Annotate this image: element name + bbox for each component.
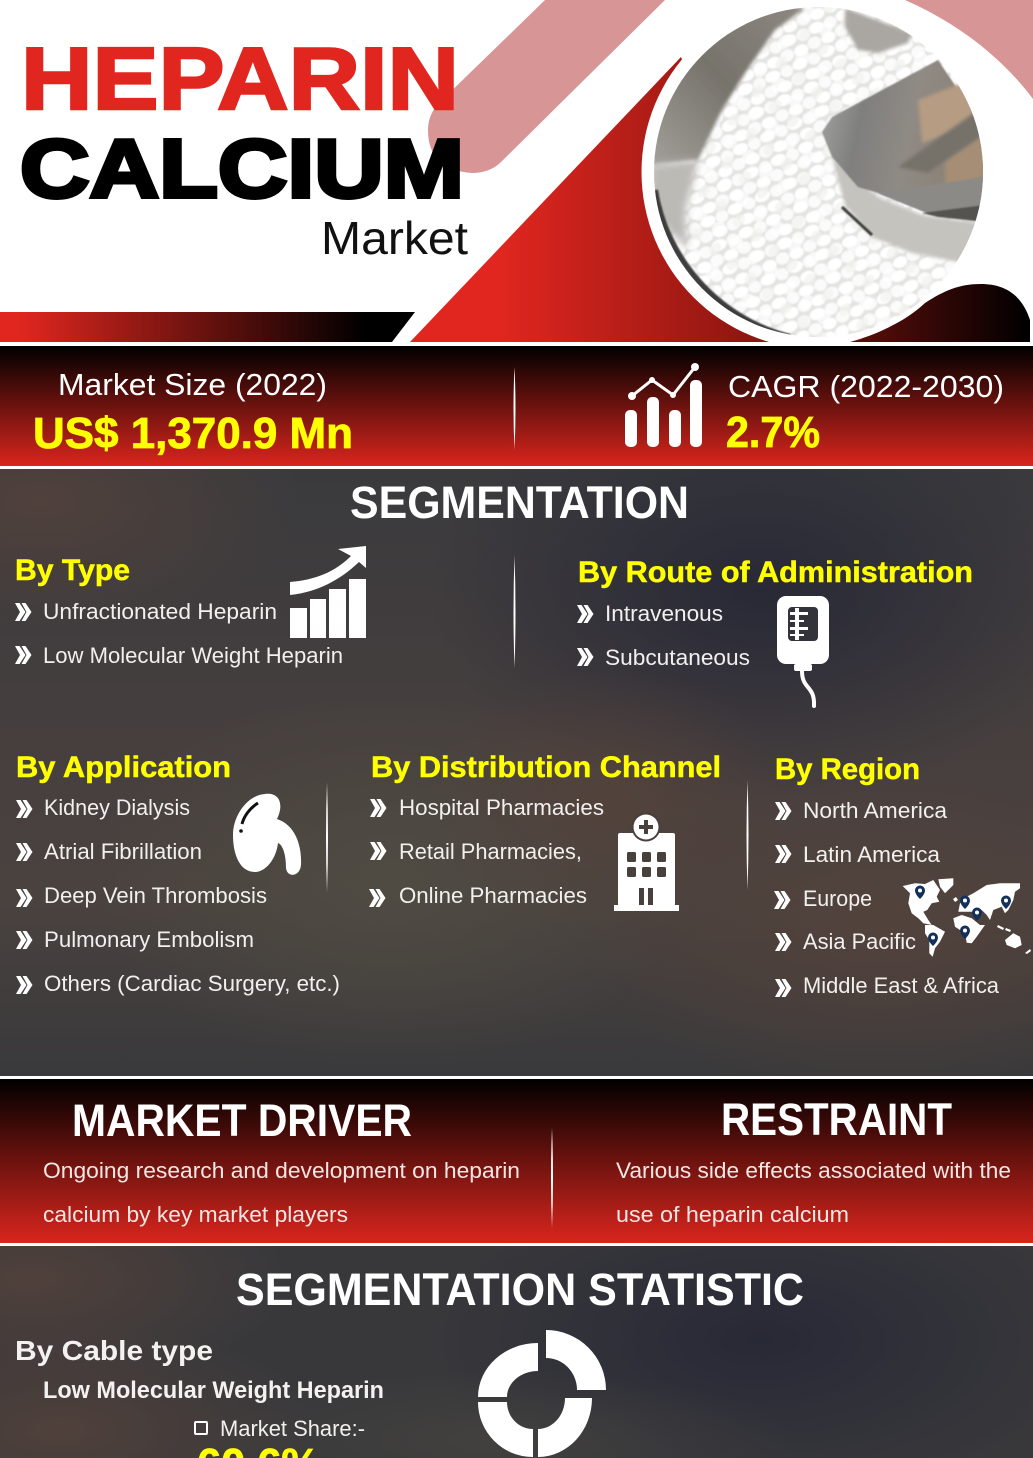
block: by route of administration: Intravenous xyxy=(605,601,723,626)
decorative pink corner shape xyxy=(905,0,1033,99)
restraint text: Various side effects associated with the xyxy=(616,1158,1011,1183)
panel: segmentation xyxy=(0,469,1033,1076)
title: CALCIUM: CALCIUM xyxy=(20,122,464,215)
block: by region: By Region xyxy=(775,753,920,786)
block: by application xyxy=(16,751,340,996)
red gradient triangle xyxy=(410,57,800,342)
dark gradient hump xyxy=(850,284,1030,342)
block: by application: Others (Cardiac Surgery, etc.) xyxy=(44,971,340,996)
heading: SEGMENTATION: SEGMENTATION xyxy=(350,477,689,528)
heading: MARKET DRIVER: MARKET DRIVER xyxy=(72,1095,412,1146)
market share label: Market Share:- xyxy=(220,1416,365,1441)
block: by type: Unfractionated Heparin xyxy=(43,599,277,624)
block: by route of administration xyxy=(577,556,973,706)
block: by application: Kidney Dialysis xyxy=(44,795,190,820)
CAGR value: 2.7% xyxy=(726,408,820,457)
icon: growth bar chart with trend line xyxy=(625,363,702,447)
heading: SEGMENTATION STATISTIC: SEGMENTATION STATISTIC xyxy=(236,1264,804,1315)
panel: segmentation statistic xyxy=(0,1246,1033,1458)
block: by distribution channel: By Distribution Channel xyxy=(371,751,721,784)
photo: white heparin calcium tablets in a metal bowl with scoop xyxy=(640,0,990,342)
divider line xyxy=(0,466,1033,469)
block: by route of administration: By Route of Administration xyxy=(578,556,973,589)
block: by distribution channel: Hospital Pharmacies xyxy=(399,795,604,820)
block: by application: Deep Vein Thrombosis xyxy=(44,883,267,908)
band: market driver and restraint xyxy=(0,1079,1033,1243)
block: by region xyxy=(774,753,1031,998)
restraint text: use of heparin calcium xyxy=(616,1202,849,1227)
block: by application: Atrial Fibrillation xyxy=(44,839,202,864)
block: by type: Low Molecular Weight Heparin xyxy=(43,643,343,668)
market driver text xyxy=(43,1158,520,1227)
leading segment name: Low Molecular Weight Heparin xyxy=(43,1377,384,1404)
icon: rising bars with arrow xyxy=(290,546,366,638)
block: by type: By Type xyxy=(15,554,130,587)
divider line xyxy=(0,1076,1033,1079)
block: by type xyxy=(15,546,366,668)
icon: hospital building xyxy=(614,812,679,911)
icon: world map with location pins xyxy=(903,878,1031,957)
block: by region: Middle East & Africa xyxy=(803,973,1000,998)
header gradient bar xyxy=(0,312,415,342)
header background xyxy=(0,0,1033,342)
market size value: US$ 1,370.9 Mn xyxy=(33,409,353,458)
block: by region: North America xyxy=(803,798,948,823)
band: market size and CAGR xyxy=(0,346,1033,466)
decorative pink diagonal band xyxy=(428,0,665,173)
icon: kidney xyxy=(233,794,301,875)
title: Market: Market xyxy=(321,212,468,264)
market size label: Market Size (2022) xyxy=(58,367,327,402)
white ring behind photo xyxy=(642,60,800,342)
block: by application: By Application xyxy=(16,751,231,784)
block: by region: Asia Pacific xyxy=(803,929,916,954)
block: by route of administration: Subcutaneous xyxy=(605,645,750,670)
divider line xyxy=(0,342,1028,346)
checkbox bullet xyxy=(195,1422,207,1434)
restraint text xyxy=(616,1158,1011,1227)
market driver text: Ongoing research and development on heparin xyxy=(43,1158,520,1183)
divider line xyxy=(0,1243,1033,1246)
block: by distribution channel: Retail Pharmacies, xyxy=(399,839,582,864)
subheading: by cable type: By Cable type xyxy=(15,1335,213,1366)
block: by distribution channel: Online Pharmacies xyxy=(399,883,587,908)
block: by region: Europe xyxy=(803,886,872,911)
title: HEPARIN: HEPARIN xyxy=(21,29,459,128)
icon: IV bag xyxy=(777,596,829,706)
chart: donut xyxy=(478,1330,606,1457)
block: by application: Pulmonary Embolism xyxy=(44,927,254,952)
block: by region: Latin America xyxy=(803,842,941,867)
title block xyxy=(20,29,468,264)
block: by distribution channel xyxy=(369,751,721,911)
CAGR label: CAGR (2022-2030) xyxy=(728,369,1004,404)
market driver text: calcium by key market players xyxy=(43,1202,348,1227)
heading: RESTRAINT: RESTRAINT xyxy=(721,1094,952,1145)
